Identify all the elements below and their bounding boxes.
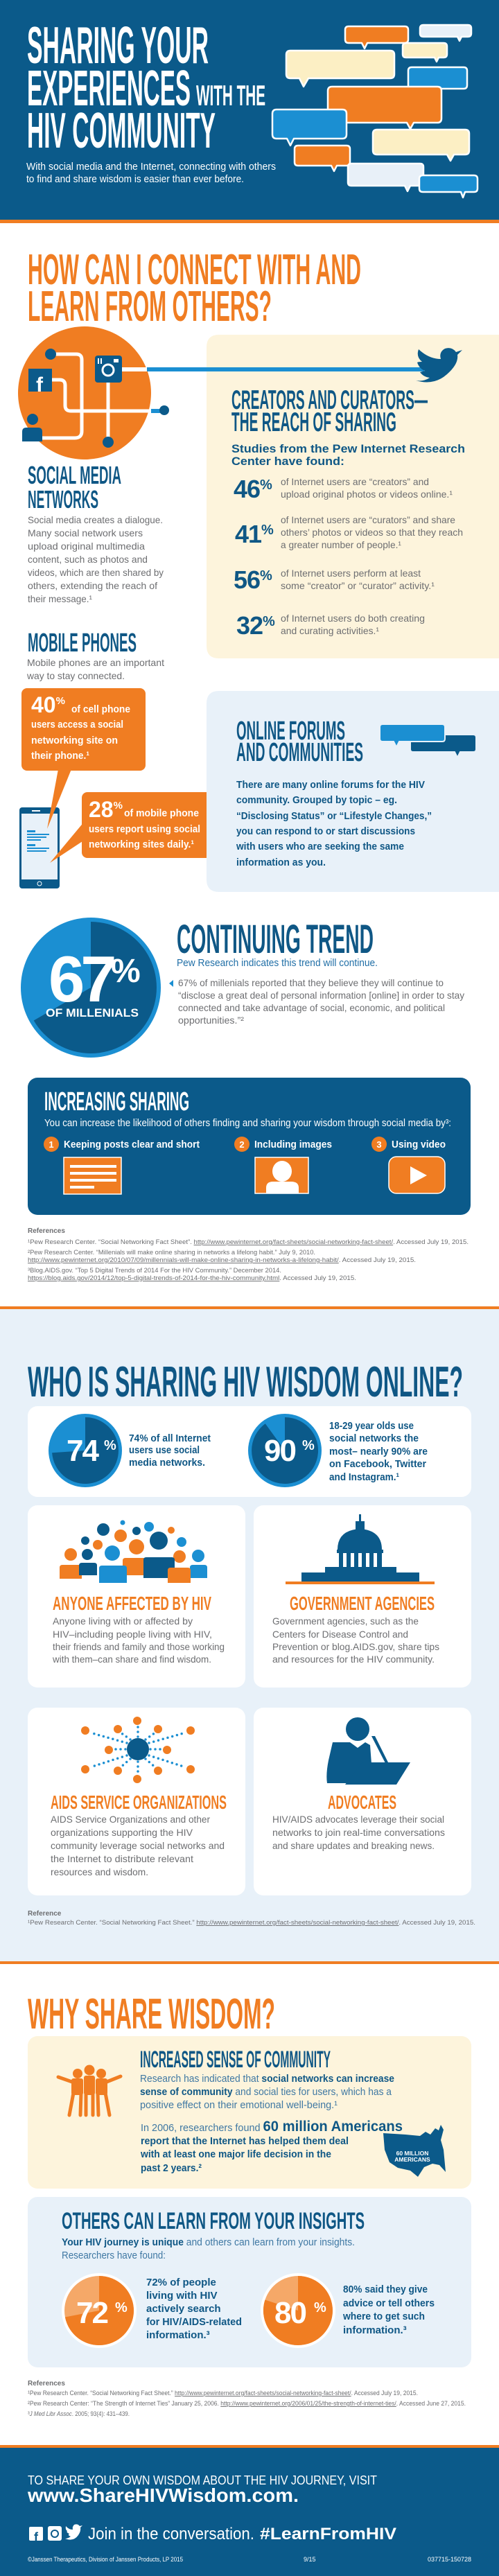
panel: government agencies: and resources for the HIV community. xyxy=(272,1654,435,1665)
panel: stats 74% and 90%: social networks the xyxy=(329,1432,419,1444)
chart: 80%: % xyxy=(314,2300,326,2315)
panel: others can learn: 80% said they give xyxy=(343,2284,428,2295)
footer: www.ShareHIVWisdom.com . xyxy=(27,2485,299,2506)
references 1: http://www.pewinternet.org/2010/07/09/millennials-will-make-online-sharing-in-networks-a-lifelong-habit/ . Accessed July 19, 2015. xyxy=(28,1256,416,1264)
text: forums body: “Disclosing Status” or “Lifestyle Changes,” xyxy=(236,810,432,822)
callout: 40%: % xyxy=(56,695,65,707)
panel: AIDS service organizations: organizations supporting the HIV xyxy=(51,1827,193,1838)
stat: 41% xyxy=(235,514,463,550)
icons: social media xyxy=(29,2524,82,2544)
chart: 72%: 72 xyxy=(76,2296,107,2330)
stat: 32%: of Internet users do both creating xyxy=(281,613,425,624)
footer: 037715-150728 xyxy=(428,2556,471,2563)
chart: 72%: % xyxy=(115,2300,128,2315)
text block: continuing trend: “disclose a great deal of personal information [online] in order to stay xyxy=(178,990,464,1001)
subtitle xyxy=(26,161,276,185)
text block: mobile phones: MOBILE PHONES xyxy=(28,629,137,658)
text block: social media networks: NETWORKS xyxy=(28,485,98,514)
text block: mobile phones: Mobile phones are an important xyxy=(27,657,164,668)
text block: social media networks: others, extending the reach of xyxy=(28,580,157,591)
callout: 28%: 28 xyxy=(89,797,114,822)
panel: stats 74% and 90%: 18-29 year olds use xyxy=(329,1420,414,1432)
stat: 32%: and curating activities.¹ xyxy=(281,625,379,636)
text: forums body: with users who are seeking the same xyxy=(236,841,404,852)
panel: stats 74% and 90%: most– nearly 90% are xyxy=(329,1446,428,1457)
icon: network xyxy=(81,1717,195,1783)
chart: 74%: % xyxy=(104,1438,116,1453)
callout: 28%: % xyxy=(114,800,123,812)
footer: Join in the conversation. xyxy=(88,2525,254,2543)
stat: 46%: % xyxy=(260,477,272,493)
panel: advocates: HIV/AIDS advocates leverage their social xyxy=(272,1814,444,1825)
heading: online forums xyxy=(236,717,363,767)
references 1: ¹Pew Research Center. “Social Networking Fact Sheet”. http://www.pewinternet.org/fact-sheets/social-networking-fact-sheet/ . Accessed July 19, 2015. xyxy=(28,1238,469,1246)
panel: increased sense of community: past 2 years.² xyxy=(141,2162,202,2174)
references 3: References xyxy=(28,2380,65,2387)
panel: stats 74% and 90%: users use social xyxy=(129,1444,200,1456)
item 1: keeping posts clear: 1 xyxy=(49,1139,54,1150)
references 1: References xyxy=(28,1227,65,1235)
panel: AIDS service organizations: AIDS SERVICE ORGANIZATIONS xyxy=(51,1791,227,1813)
icon: capitol xyxy=(286,1514,435,1584)
chart: 74%: 74 xyxy=(67,1434,99,1468)
footer: 9/15 xyxy=(304,2556,316,2563)
panel: AIDS service organizations: the Internet to distribute relevant xyxy=(51,1853,193,1864)
panel: others can learn: Your HIV journey is unique and others can learn from your insights. xyxy=(62,2236,355,2248)
chart: 74% xyxy=(49,1414,122,1487)
stat: 56% xyxy=(234,566,435,594)
icon: person xyxy=(22,414,42,441)
footer: #LearnFromHIV xyxy=(260,2525,396,2543)
chart: 72% xyxy=(62,2273,137,2348)
panel: online forums xyxy=(207,691,499,892)
section: who is sharing xyxy=(0,1306,499,1964)
chart: 90%: % xyxy=(302,1438,315,1453)
panel: government agencies: Prevention or blog.AIDS.gov, share tips xyxy=(272,1641,439,1652)
chart: 90% xyxy=(248,1414,322,1487)
panel: stats 74% and 90%: media networks. xyxy=(129,1457,205,1469)
text block: continuing trend xyxy=(169,917,464,1026)
footer xyxy=(0,2445,499,2576)
heading: why share wisdom: WHY SHARE WISDOM? xyxy=(28,1990,275,2038)
header banner xyxy=(0,0,499,223)
panel: increasing sharing: INCREASING SHARING xyxy=(44,1087,189,1116)
panel: others can learn: information.³ xyxy=(343,2324,407,2336)
text block: social media networks: Social media creates a dialogue. xyxy=(28,514,163,525)
icon: crowd xyxy=(60,1521,207,1583)
text block: mobile phones: way to stay connected. xyxy=(26,670,125,681)
heading: online forums: AND COMMUNITIES xyxy=(236,738,363,767)
stat: 46%: upload original photos or videos online.¹ xyxy=(281,489,453,500)
icon: speech bubbles xyxy=(272,25,478,198)
panel: anyone affected xyxy=(28,1505,245,1688)
panel: others can learn: 72% of people xyxy=(146,2277,216,2288)
panel: advocates: ADVOCATES xyxy=(328,1791,396,1813)
chart: 67% of millenials xyxy=(21,918,161,1058)
panel: increased sense of community: In 2006, researchers found 60 million Americans xyxy=(141,2119,403,2135)
panel: AIDS service organizations: community leverage social networks and xyxy=(51,1840,225,1851)
intro text: Studies from the Pew Internet Research xyxy=(231,442,465,455)
item 1: keeping posts clear xyxy=(44,1137,200,1194)
icon: social network circle xyxy=(18,326,424,459)
panel: anyone affected: HIV–including people living with HIV, xyxy=(53,1629,212,1640)
heading: how can I connect xyxy=(28,246,361,331)
intro text xyxy=(231,442,465,468)
stat: 56%: 56 xyxy=(234,566,260,594)
chart: 67% of millenials: % xyxy=(111,953,141,990)
callout: 28% xyxy=(50,792,215,863)
chart: 90%: 90 xyxy=(264,1434,295,1468)
references 3: ²Pew Research Center: “The Strength of Internet Ties” January 25, 2006. http://www.pewinternet.org/2006/01/25/the-strength-of-internet-ties/. Accessed June 27, 2015. xyxy=(28,2400,466,2408)
text block: continuing trend: 67% of millenials reported that they believe they will continue to xyxy=(178,977,444,988)
references 1: ²Pew Research Center. “Millenials will make online sharing in networks a lifelong habit.” July 9, 2010. xyxy=(28,1249,315,1256)
stat: 32%: 32 xyxy=(236,611,263,640)
icon: group of people xyxy=(58,2065,121,2115)
panel: creators and curators xyxy=(207,335,499,658)
item 2: including images: 2 xyxy=(239,1139,245,1150)
stat: 41%: a greater number of people.¹ xyxy=(281,539,401,550)
text block: social media networks: videos, which are then shared by xyxy=(28,567,164,578)
icon: US map: AMERICANS xyxy=(394,2156,430,2163)
item 3: using video xyxy=(371,1137,446,1193)
callout: 28%: networking sites daily.¹ xyxy=(89,839,194,850)
panel: others can learn: actively search xyxy=(146,2303,221,2315)
panel: government agencies: Centers for Disease Control and xyxy=(272,1629,408,1640)
item 2: including images: Including images xyxy=(254,1139,332,1150)
panel: others can learn: for HIV/AIDS-related xyxy=(146,2316,242,2328)
panel: increased sense of community: positive effect on their emotional well-being.¹ xyxy=(140,2099,338,2111)
text block: continuing trend: opportunities.”² xyxy=(178,1015,244,1026)
subtitle: With social media and the Internet, connecting with others xyxy=(26,161,276,173)
icon: facebook xyxy=(28,369,52,396)
header banner: WITH THE xyxy=(196,79,265,112)
panel: increasing sharing xyxy=(28,1078,471,1215)
item 3: using video: Using video xyxy=(392,1139,446,1150)
text block: social media networks: their message.¹ xyxy=(28,593,92,604)
icon: twitter bird xyxy=(416,348,462,383)
panel: advocates xyxy=(254,1708,471,1895)
panel: increased sense of community xyxy=(28,2036,471,2189)
title xyxy=(27,16,265,159)
references 1: ³Blog.AIDS.gov. “Top 5 Digital Trends of 2014 For the HIV Community.” December 2014. xyxy=(28,1267,281,1274)
icon: US map: 60 MILLION xyxy=(396,2150,428,2157)
panel: stats 74% and 90%: 74% of all Internet xyxy=(129,1432,211,1444)
callout: 40%: users access a social xyxy=(31,719,123,730)
callout: 40%: 40 xyxy=(31,692,56,717)
callout: 28%: users report using social xyxy=(89,823,200,835)
panel: increasing sharing: You can increase the likelihood of others finding and sharing your wisdom through social media by³: xyxy=(44,1118,451,1129)
stat: 32% xyxy=(236,611,425,640)
heading: creators and curators xyxy=(231,385,428,437)
panel: others can learn: where to get such xyxy=(342,2311,425,2322)
panel: increased sense of community: Research has indicated that social networks can increase xyxy=(140,2073,394,2085)
stat: 46%: of Internet users are “creators” and xyxy=(281,476,429,487)
icon: instagram xyxy=(95,356,122,383)
intro text: Center have found: xyxy=(231,455,344,468)
item 2: including images xyxy=(234,1137,332,1193)
panel: anyone affected: Anyone living with or affected by xyxy=(53,1615,193,1627)
heading: online forums: ONLINE FORUMS xyxy=(236,717,345,746)
stat: 56%: of Internet users perform at least xyxy=(281,568,421,579)
text: forums body: There are many online forums for the HIV xyxy=(236,779,425,791)
callout: 28%: of mobile phone xyxy=(124,807,199,819)
references 3: ¹Pew Research Center. “Social Networking Fact Sheet.” http://www.pewinternet.org/fact-sheets/social-networking-fact-sheet/. Accessed July 19, 2015. xyxy=(28,2390,418,2397)
reference 2 xyxy=(28,1910,475,1927)
title: HIV COMMUNITY xyxy=(27,103,216,159)
icon: phone xyxy=(19,807,60,888)
panel: others can learn xyxy=(28,2197,471,2367)
stat: 41%: % xyxy=(261,523,274,538)
panel: anyone affected: their friends and family and those working xyxy=(53,1641,225,1652)
panel: AIDS service organizations: AIDS Service Organizations and other xyxy=(51,1814,210,1825)
panel: stats 74% and 90%: on Facebook, Twitter xyxy=(329,1458,426,1470)
callout: 40%: their phone.¹ xyxy=(31,750,89,762)
references 1: https://blog.aids.gov/2014/12/top-5-digital-trends-of-2014-for-the-hiv-community.html . Accessed July 19, 2015. xyxy=(28,1274,356,1282)
icon: US map xyxy=(383,2125,446,2177)
text: forums body: you can respond to or start discussions xyxy=(236,825,415,837)
reference 2: Reference xyxy=(28,1910,62,1918)
panel: stats 74% and 90% xyxy=(28,1406,471,1497)
references 3: ³J Med Libr Assoc. 2005; 93(4): 431–439. xyxy=(28,2410,130,2418)
stat: 41%: others’ photos or videos so that they reach xyxy=(281,527,463,538)
chart: 67% of millenials: 67 xyxy=(49,943,114,1015)
callout: 40%: networking site on xyxy=(31,735,118,746)
chart: 67% of millenials: OF MILLENIALS xyxy=(46,1006,139,1019)
item 1: keeping posts clear: Keeping posts clear and short xyxy=(64,1139,200,1150)
text block: social media networks: SOCIAL MEDIA xyxy=(28,461,121,489)
title: EXPERIENCES xyxy=(27,61,191,116)
panel: government agencies: Government agencies, such as the xyxy=(272,1615,419,1627)
stat: 56%: some “creator” or “curator” activity.¹ xyxy=(281,580,435,591)
panel: advocates: networks to join real-time conversations xyxy=(272,1827,445,1838)
callout: 40%: of cell phone xyxy=(71,703,130,715)
icon: facebook: f xyxy=(36,374,44,396)
panel: government agencies xyxy=(254,1505,471,1688)
text block: social media networks: content, such as photos and xyxy=(28,554,148,565)
text block: social media networks xyxy=(28,461,164,604)
text block: social media networks: Many social network users xyxy=(28,527,143,538)
icon: forum bubbles xyxy=(380,724,476,757)
text block: social media networks: upload original multimedia xyxy=(28,541,145,552)
panel: others can learn: advice or tell others xyxy=(343,2297,435,2309)
chart: 80%: 80 xyxy=(274,2296,306,2330)
icons: social media: f xyxy=(34,2530,39,2544)
item 3: using video: 3 xyxy=(376,1139,382,1150)
panel: AIDS service organizations xyxy=(28,1708,245,1895)
panel: others can learn: Researchers have found: xyxy=(62,2250,166,2261)
panel: advocates: and share updates and breaking news. xyxy=(272,1840,435,1851)
stat: 41%: 41 xyxy=(235,520,261,548)
chart: 80% xyxy=(261,2273,335,2348)
stat: 56%: % xyxy=(260,568,272,584)
panel: others can learn: information.³ xyxy=(146,2329,210,2341)
panel: increased sense of community: sense of community and social ties for users, which has a xyxy=(140,2086,392,2098)
text: forums body xyxy=(236,779,432,868)
panel: increased sense of community: report that the Internet has helped them deal xyxy=(141,2135,349,2147)
text block: continuing trend: Pew Research indicates this trend will continue. xyxy=(177,957,378,969)
stat: 41%: of Internet users are “curators” and share xyxy=(281,514,455,525)
stat: 32%: % xyxy=(263,614,275,629)
text: forums body: information as you. xyxy=(236,857,326,868)
panel: increased sense of community: with at least one major life decision in the xyxy=(140,2148,331,2160)
reference 2: ¹Pew Research Center. “Social Networking Fact Sheet.” http://www.pewinternet.org/fact-sheets/social-networking-fact-sheet/ . Accessed July 19, 2015. xyxy=(28,1919,475,1927)
icon: advocate at podium xyxy=(326,1717,410,1785)
references 3 xyxy=(28,2380,466,2418)
stat: 46%: 46 xyxy=(234,475,260,503)
text: forums body: community. Grouped by topic – eg. xyxy=(236,794,397,806)
title: SHARING YOUR xyxy=(27,16,209,74)
footer: ©Janssen Therapeutics, Division of Janssen Products, LP 2015 xyxy=(28,2556,183,2563)
subtitle: to find and share wisdom is easier than ever before. xyxy=(26,174,244,185)
footer: TO SHARE YOUR OWN WISDOM ABOUT THE HIV JOURNEY, VISIT xyxy=(28,2473,377,2487)
text block: mobile phones xyxy=(26,629,164,681)
text block: continuing trend: connected and take advantage of social, economic, and political xyxy=(178,1002,445,1013)
panel: anyone affected: ANYONE AFFECTED BY HIV xyxy=(53,1593,211,1614)
references 1 xyxy=(28,1227,469,1282)
panel: others can learn: living with HIV xyxy=(146,2290,218,2302)
panel: stats 74% and 90%: and Instagram.¹ xyxy=(329,1471,399,1483)
stat: 46% xyxy=(234,475,453,503)
panel: AIDS service organizations: resources and wisdom. xyxy=(51,1866,148,1877)
callout: 40% xyxy=(21,688,146,829)
panel: anyone affected: with them–can share and find wisdom. xyxy=(52,1654,211,1665)
